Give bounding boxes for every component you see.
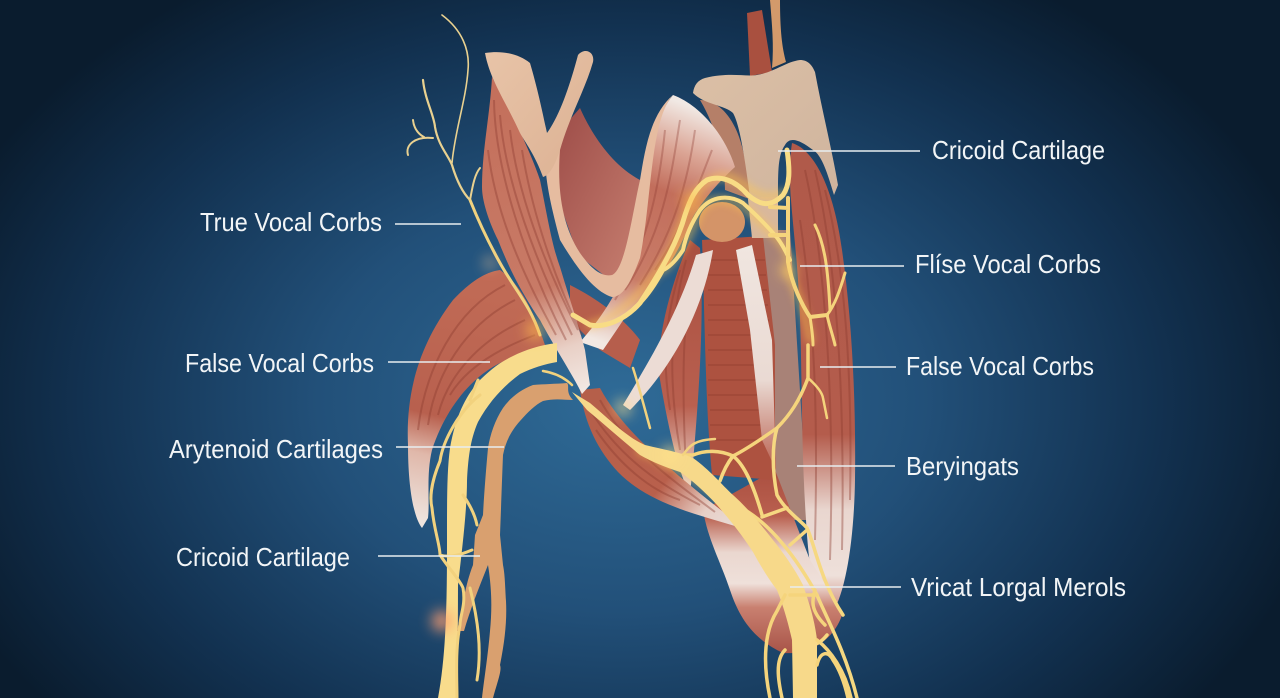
labels	[169, 135, 1126, 602]
fan muscle	[580, 95, 735, 350]
right muscle striations	[800, 170, 850, 560]
nerves	[407, 15, 857, 698]
glow highlights	[432, 193, 795, 631]
left trunk	[438, 343, 557, 698]
labels: True Vocal Corbs	[200, 207, 382, 237]
labels: Arytenoid Cartilages	[169, 434, 383, 464]
tan column behind right muscle	[753, 230, 808, 520]
lower branches	[766, 590, 851, 698]
central muscle column	[702, 236, 775, 480]
thin white strand	[623, 250, 713, 410]
large left curved muscle	[408, 270, 545, 528]
lower diagonal muscle	[580, 388, 745, 529]
column striations	[708, 260, 771, 440]
small central branch nerves	[543, 368, 715, 455]
labels: Beryingats	[906, 451, 1019, 481]
shaded recess behind fan	[700, 100, 752, 200]
labels: Vricat Lorgal Merols	[911, 572, 1126, 602]
muscle behind vertical strip	[570, 285, 640, 368]
vertical muscle striations	[488, 100, 582, 340]
main lower trunk	[572, 392, 817, 698]
left vertical muscle	[482, 77, 590, 394]
left muscle striations	[418, 285, 535, 430]
lower central muscle	[703, 470, 843, 653]
labels: Cricoid Cartilage	[176, 542, 350, 572]
labels: Cricoid Cartilage	[932, 135, 1105, 165]
nerve glow	[590, 177, 810, 545]
lower mesh	[720, 428, 857, 698]
lower left nerve branches	[431, 380, 480, 698]
left V cartilage	[485, 51, 593, 177]
top right cartilage	[693, 60, 838, 197]
tan arching tube	[457, 383, 573, 698]
upper nerve arcs	[573, 150, 789, 326]
strand muscle	[658, 240, 702, 495]
pharyngeal inner wall	[552, 108, 640, 280]
trachea tubes	[747, 0, 786, 76]
strand striations	[666, 260, 692, 470]
leader lines	[378, 151, 920, 587]
pharyngeal tan rim	[545, 95, 673, 297]
tan block	[747, 190, 778, 238]
fan striations	[615, 120, 712, 300]
thin branching nerve, top left	[407, 15, 480, 200]
tan ball	[699, 202, 745, 242]
labels: Flíse Vocal Corbs	[915, 249, 1101, 279]
right muscle	[790, 143, 855, 613]
diagonal striations	[590, 400, 715, 512]
right nerve branches	[770, 198, 827, 317]
labels: False Vocal Corbs	[185, 348, 374, 378]
labels: False Vocal Corbs	[906, 351, 1094, 381]
illustration: muscles and cartilage	[408, 0, 855, 653]
column white strip	[736, 245, 776, 470]
